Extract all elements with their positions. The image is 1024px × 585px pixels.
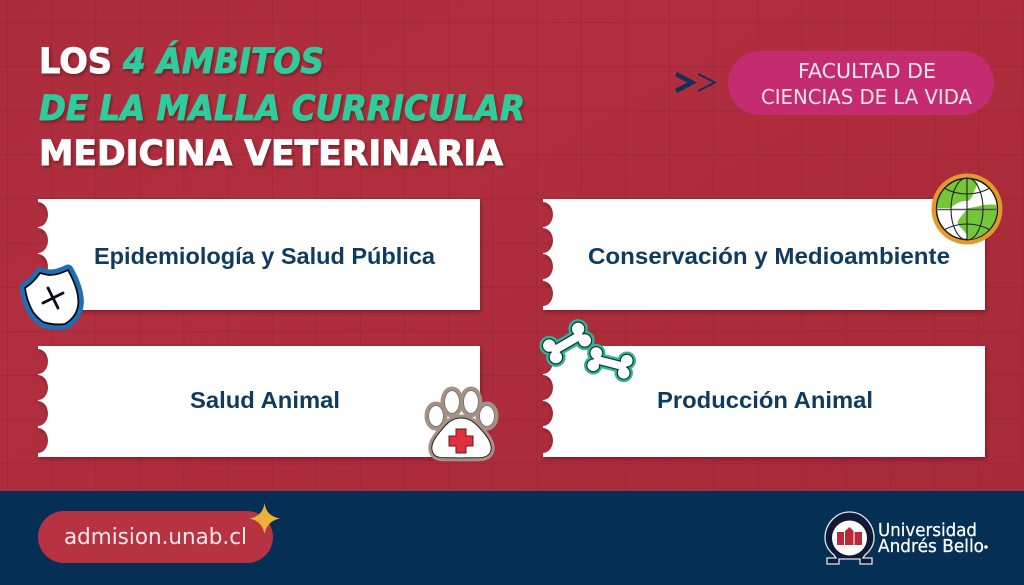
panel: Producción Animal [543,346,985,457]
panel: Producción Animal: Producción Animal [657,387,873,413]
faculty badge line 2: CIENCIAS DE LA VIDA [761,85,972,109]
icon: paw with red cross [428,390,495,458]
panel: Conservación y Medioambiente: Conservación y Medioambiente [588,243,950,269]
logo emblem [825,512,874,564]
logo: Universidad Andrés Bello [825,512,988,564]
icon: globe [932,174,1002,244]
title line 2 green: DE LA MALLA CURRICULAR [39,89,525,129]
title line 3 white: MEDICINA VETERINARIA [39,134,503,174]
title [39,40,525,174]
faculty badge [728,51,994,115]
bone two [585,345,635,381]
website button [38,511,273,563]
panel: Epidemiología y Salud Pública [38,199,480,310]
title line 1 white: LOS [39,42,112,82]
logo wordmark line 2: Andrés Bello [878,536,984,557]
faculty badge line 1: FACULTAD DE [798,59,936,83]
icon: two bones [540,320,635,381]
panel: Epidemiología y Salud Pública: Epidemiología y Salud Pública [94,243,435,269]
website button: admision.unab.cl [64,525,247,550]
footer band [0,491,1024,585]
panel: Salud Animal: Salud Animal [190,387,340,413]
logo wordmark line 1: Universidad [878,520,977,541]
icon: gold sparkle [250,503,280,534]
panel: Conservación y Medioambiente [543,199,985,310]
bone one [540,320,594,366]
icon: double chevron arrow [676,74,715,91]
panel: Salud Animal [38,346,480,457]
icon: shield with cross [25,270,78,324]
title line 1 green: 4 ÁMBITOS [122,40,324,82]
